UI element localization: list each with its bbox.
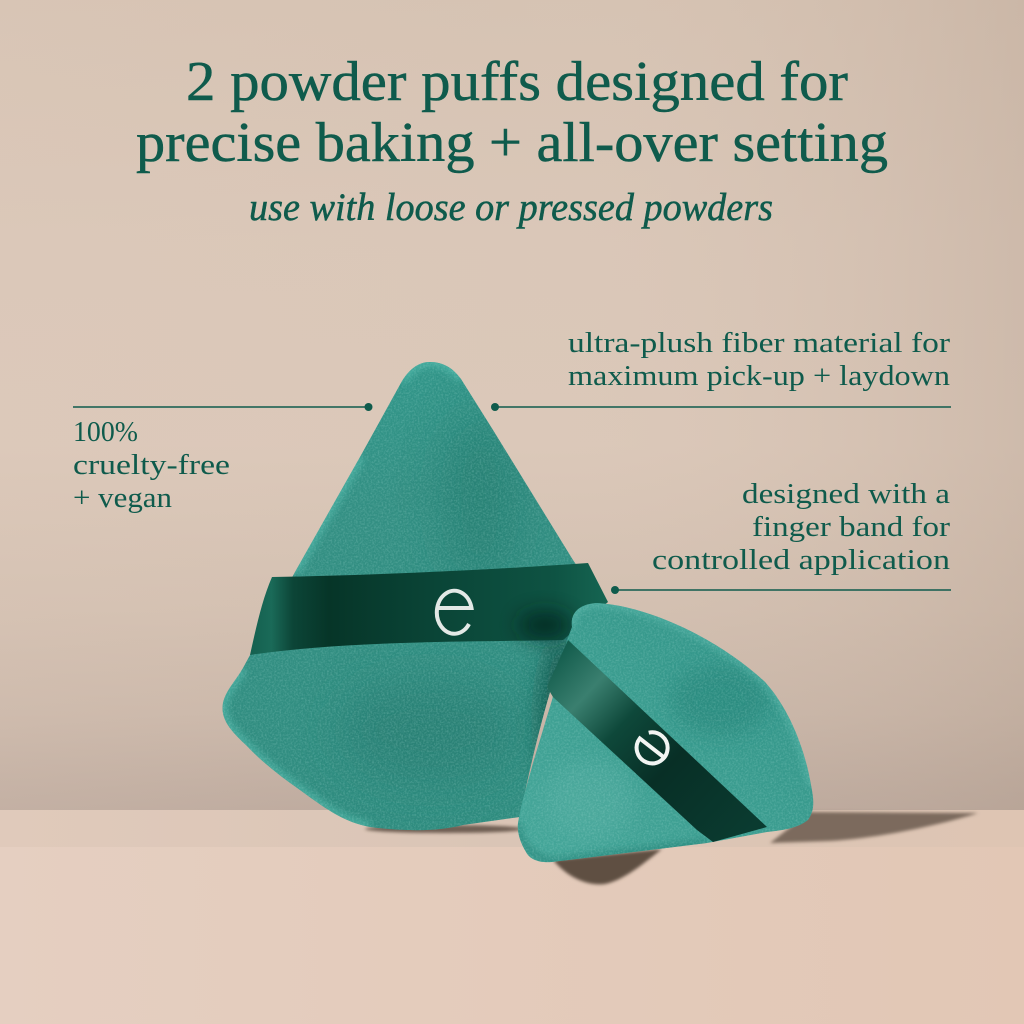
callout: ultra-plush fiber: maximum pick-up + laydown bbox=[568, 360, 951, 392]
title bbox=[136, 51, 888, 174]
callout: cruelty-free + vegan: + vegan bbox=[73, 482, 173, 514]
background wall bbox=[0, 0, 1024, 811]
finger band on large puff bbox=[250, 563, 608, 655]
large triangular powder puff bbox=[222, 362, 608, 830]
e logo on large band bbox=[437, 591, 472, 634]
callout: finger band: designed with a bbox=[742, 478, 950, 510]
table surface bbox=[0, 810, 1024, 1024]
cast shadows bbox=[365, 812, 978, 884]
callout: cruelty-free + vegan: 100% bbox=[73, 416, 138, 448]
callout: finger band bbox=[611, 478, 951, 594]
title: 2 powder puffs designed for bbox=[186, 51, 848, 113]
callout: ultra-plush fiber: ultra-plush fiber material for bbox=[568, 327, 950, 359]
subtitle: use with loose or pressed powders bbox=[249, 186, 773, 229]
finger band on small puff bbox=[547, 640, 767, 842]
callout: ultra-plush fiber bbox=[491, 327, 951, 411]
callout: finger band: controlled application bbox=[652, 544, 951, 576]
callout: cruelty-free + vegan bbox=[73, 403, 372, 514]
callout: cruelty-free + vegan: cruelty-free bbox=[73, 449, 230, 481]
title: precise baking + all-over setting bbox=[136, 112, 888, 174]
callout: finger band: finger band for bbox=[752, 511, 950, 543]
small fan-shaped powder puff bbox=[510, 595, 820, 870]
e logo on small band bbox=[630, 726, 674, 770]
